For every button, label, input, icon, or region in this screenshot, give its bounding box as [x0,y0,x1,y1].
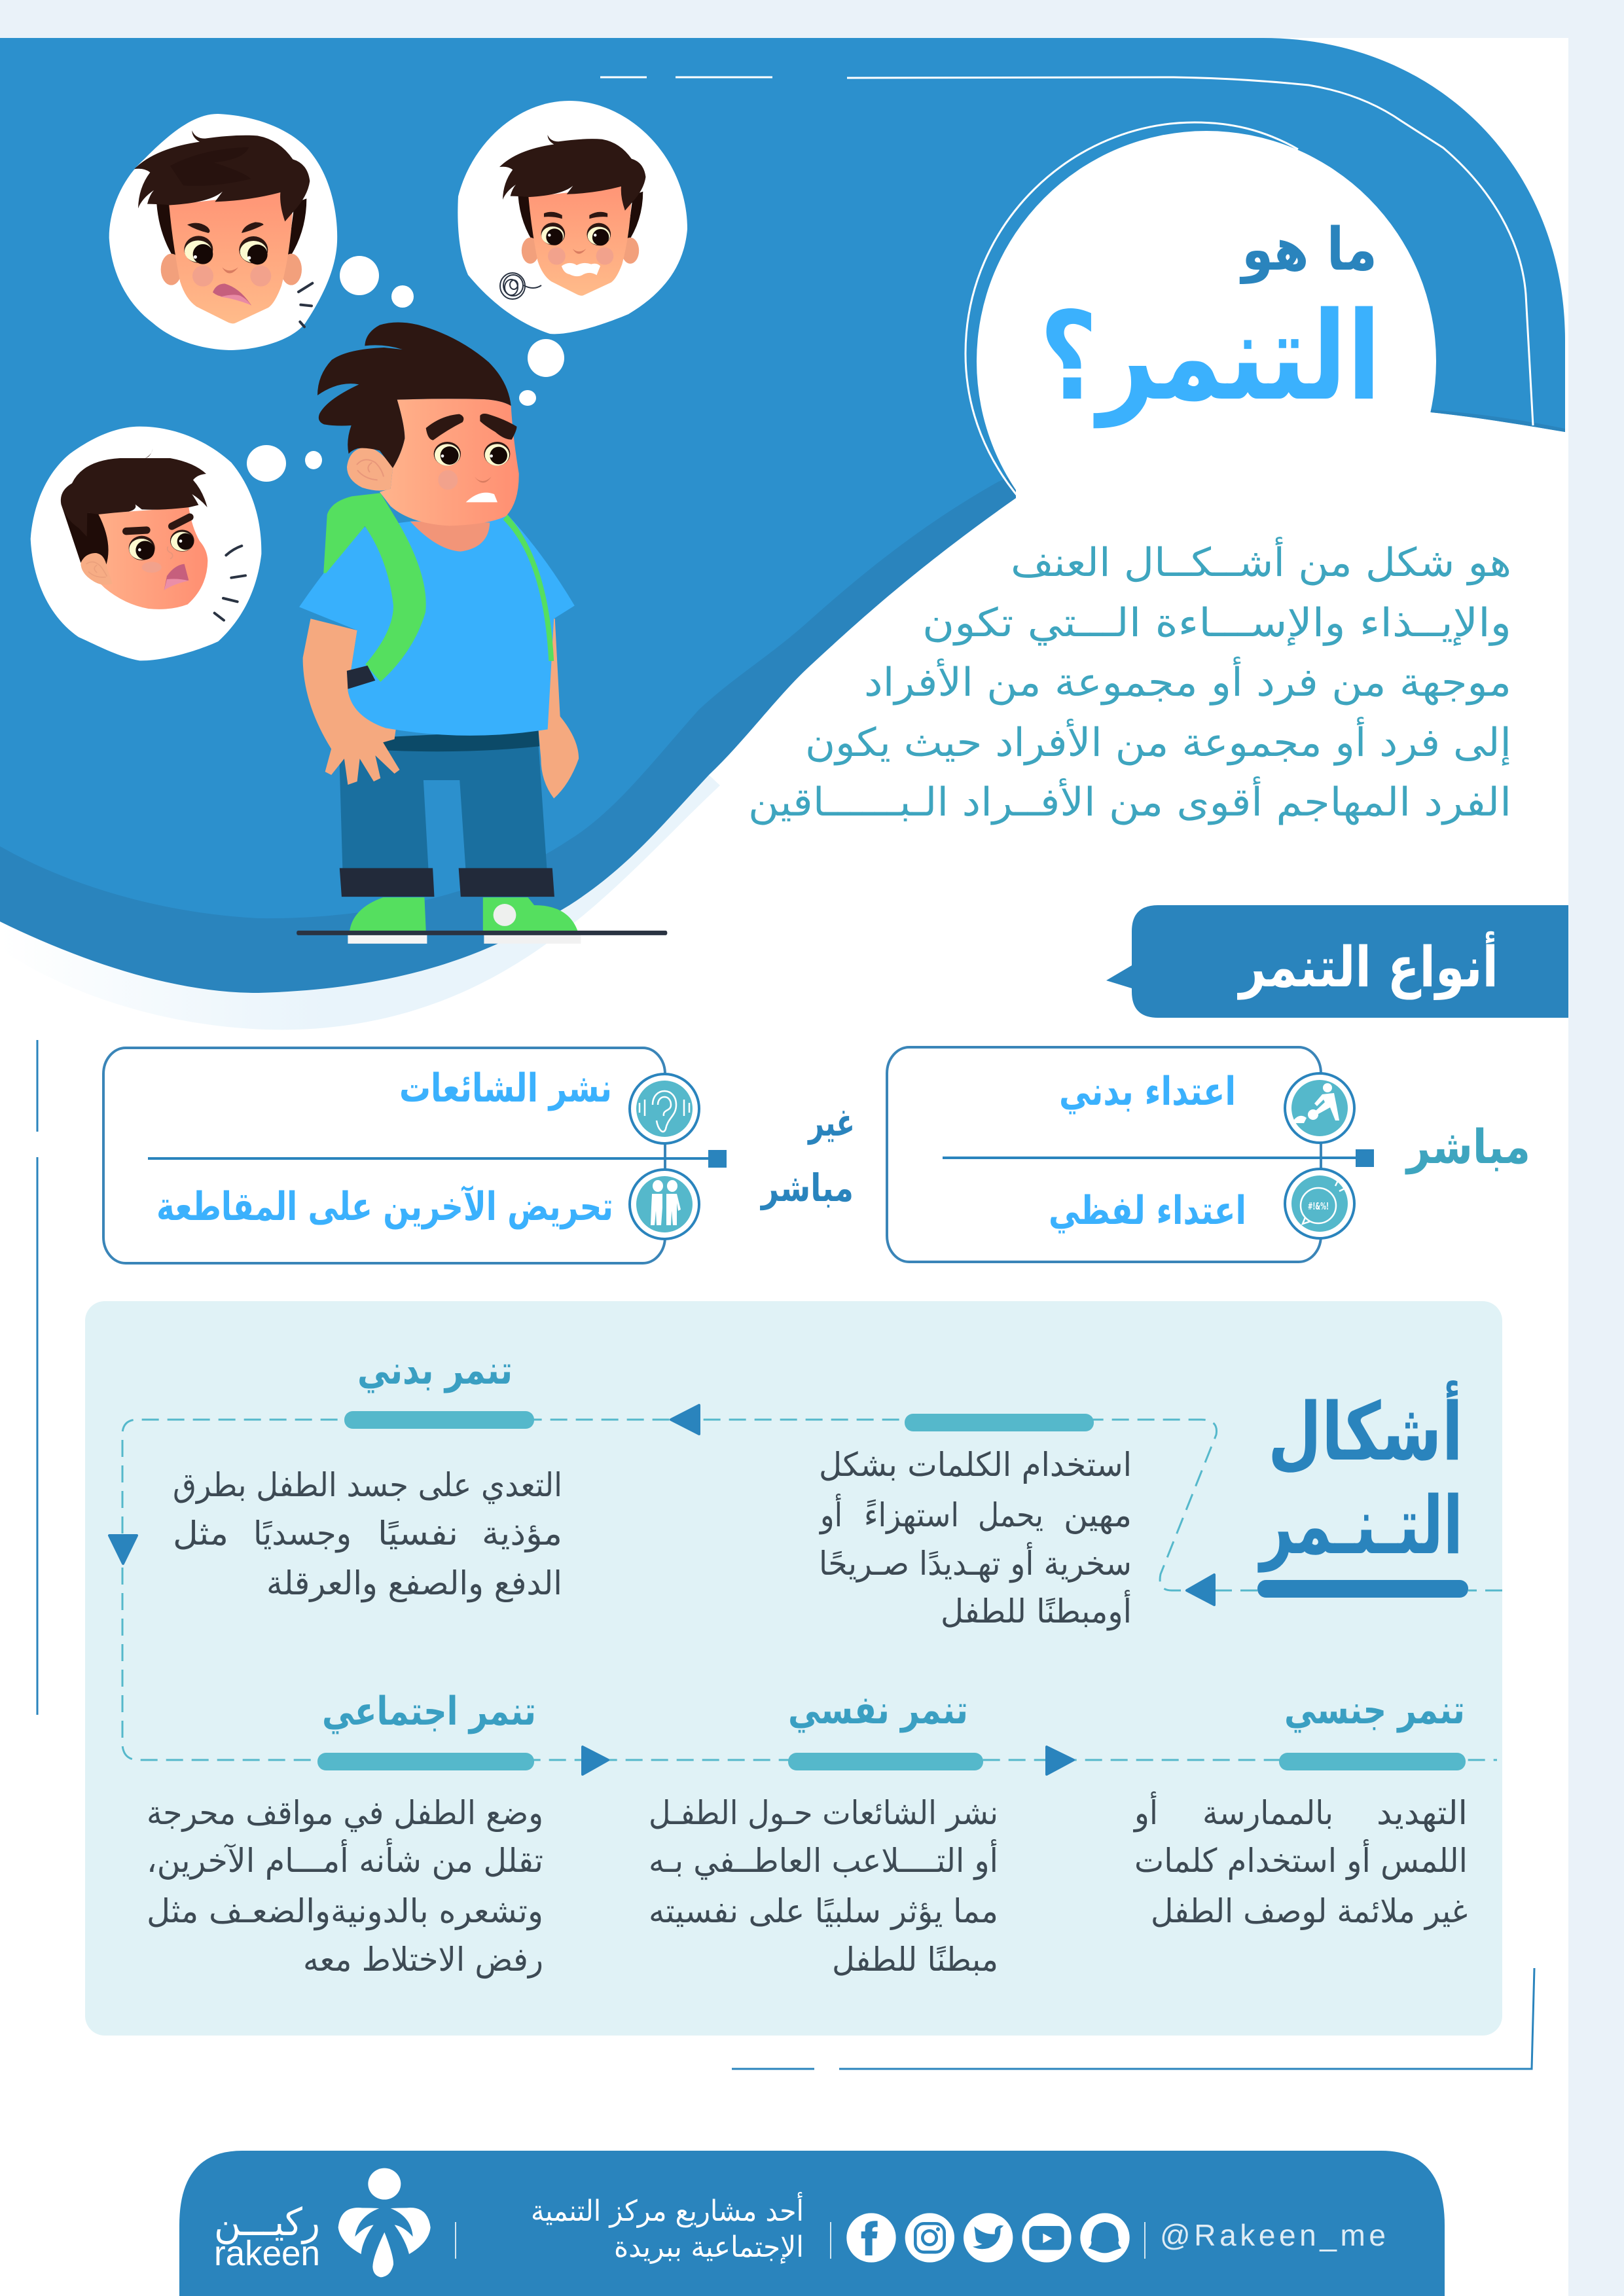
arrow: to psychological [583,1747,608,1774]
tagline [531,2192,804,2264]
item: physical bullying: مؤذية [482,1515,562,1552]
intro paragraph [748,537,1511,825]
brand name [214,2200,320,2273]
label: spreading rumors: نشر الشائعات [399,1066,612,1111]
item: verbal bullying description: مهين [1064,1496,1132,1535]
item: verbal bullying description [818,1414,1132,1631]
item: social bullying: رفض الاختلاط معه [303,1941,543,1979]
item: social bullying: وضع الطفل في مواقف محرجة [147,1794,543,1833]
thought bubble: crying face [109,114,337,350]
brand name: rakeen [214,2234,320,2273]
icon: verbal abuse [1285,1169,1354,1238]
left arm [303,619,399,785]
item: verbal bullying description: سخرية أو تهـديدًا صـريحًا [819,1542,1132,1583]
panel: forms of bullying [85,1301,1502,2036]
item: verbal bullying description: أومبطنًا للطفل [941,1590,1132,1631]
label: indirect: غير [807,1100,855,1145]
brand name: ركيـــن [214,2200,320,2245]
icon: verbal abuse: #!&%! [1308,1200,1329,1212]
cuffs [340,868,554,897]
banner: types of bullying [1106,905,1568,1018]
intro paragraph: هو شكل من أشــكــال العنف [1011,537,1511,586]
item: psychological bullying: مبطنًا للطفل [832,1941,998,1979]
tagline: الإجتماعية ببريدة [614,2231,804,2264]
item: psychological bullying: مما يؤثر سلبيًا على نفسيته [649,1892,998,1930]
item: physical bullying: وجسديًا [253,1515,352,1553]
thought bubble: grimacing face [458,101,687,334]
arrow: downward [109,1535,137,1564]
dividers [456,2222,1145,2259]
title: what is: ما هو [1240,215,1377,284]
arrow: into verbal [1187,1575,1214,1605]
backpack straps [323,493,426,682]
heading: forms of bullying: التـنـمر [1257,1479,1463,1573]
intro paragraph: والإيــذاء والإســـاءة الـــتي تكون [922,600,1511,646]
item: psychological bullying [649,1687,998,1979]
decorative bottom right corner line [732,1968,1534,2069]
intro paragraph: موجهة من فرد أو مجموعة من الأفراد [864,656,1511,706]
item: verbal bullying description: يحمل [978,1496,1043,1534]
item: sexual bullying: اللمس أو استخدام كلمات [1134,1839,1468,1880]
icon: twitter [964,2213,1013,2263]
intro paragraph: الفرد المهاجم أقوى من الأفــراد الـبــــــاقين [748,776,1511,825]
icon: facebook [846,2213,896,2263]
item: psychological bullying: تنمر نفسي [788,1687,968,1733]
panel: indirect bullying [103,1048,727,1263]
intro paragraph: إلى فرد أو مجموعة من الأفراد حيث يكون [805,717,1511,766]
label: indirect [760,1100,855,1211]
heading: forms of bullying: أشكال [1268,1380,1463,1479]
item: sexual bullying: التهديد [1377,1794,1468,1833]
label: inciting boycott: تحريض الآخرين على المقاطعة [156,1184,613,1230]
item: sexual bullying: بالممارسة [1202,1794,1333,1832]
label: direct: مباشر [1405,1119,1530,1175]
icon: physical attack [1285,1073,1354,1143]
item: social bullying: تقلل من شأنه أمـــام الآخرين،‏ [147,1838,543,1880]
label: indirect: مباشر [760,1166,854,1211]
item: physical bullying: تنمر بدني [357,1348,513,1393]
item: sexual bullying [1132,1687,1468,1930]
title: bullying: التنمر؟ [1039,285,1381,429]
item: physical bullying: الدفع والصفع والعرقلة [266,1564,562,1603]
ground line [297,931,667,935]
illustration: boy [297,322,667,944]
small thought dots [247,256,564,482]
jeans [339,742,547,872]
item: physical bullying [173,1348,562,1603]
title circle [965,122,1436,592]
handle: @Rakeen_me [1160,2218,1386,2252]
heading: forms of bullying [1257,1380,1463,1573]
footer [179,2151,1445,2296]
tagline: أحد مشاريع مركز التنمية [531,2192,804,2228]
icon: ear [630,1074,699,1143]
left decorative vertical line [37,1040,38,1715]
decorative top white line segments [600,77,1533,425]
item: physical bullying: مثل [173,1515,228,1552]
label: verbal assault: اعتداء لفظي [1049,1188,1246,1234]
item: physical bullying: نفسيًا [378,1515,458,1552]
right arm and hand [538,619,579,798]
social icons [846,2213,1130,2263]
item: sexual bullying: غير ملائمة لوصف الطفل [1151,1892,1468,1930]
thought bubble: shouting face [31,427,261,660]
icon: people whispering [630,1170,699,1239]
item: social bullying: تنمر اجتماعي [322,1689,536,1734]
arrow: to physical [671,1405,699,1434]
item: physical bullying: التعدي على جسد الطفل بطرق [173,1466,562,1504]
header background wave [0,38,1565,1030]
boy head [317,322,519,552]
shirt [299,514,575,736]
arrow: to sexual [1047,1747,1074,1774]
item: verbal bullying description: استخدام الكلمات بشكل [819,1446,1132,1484]
shoes [350,897,426,933]
icon: youtube [1022,2213,1072,2263]
item: psychological bullying: أو التــــلاعب العاطــفي بـه [649,1839,998,1880]
item: sexual bullying: أو [1132,1791,1158,1833]
banner: types of bullying: أنواع التنمر [1237,931,1498,1000]
icon: snapchat [1080,2213,1130,2263]
item: verbal bullying description: أو [818,1494,842,1535]
item: psychological bullying: نشر الشائعات حـول الطفـل [649,1794,998,1832]
item: verbal bullying description: استهزاءً [864,1496,959,1535]
icon: instagram [905,2213,954,2263]
item: social bullying [147,1689,543,1979]
item: sexual bullying: تنمر جنسي [1284,1687,1465,1733]
item: social bullying: وتشعره بالدونيةوالضعـف مثل [147,1892,543,1931]
label: physical assault: اعتداء بدني [1059,1069,1236,1115]
dashed flow path [122,1420,1502,1760]
panel: direct bullying [887,1047,1374,1262]
logo mark [338,2168,431,2277]
